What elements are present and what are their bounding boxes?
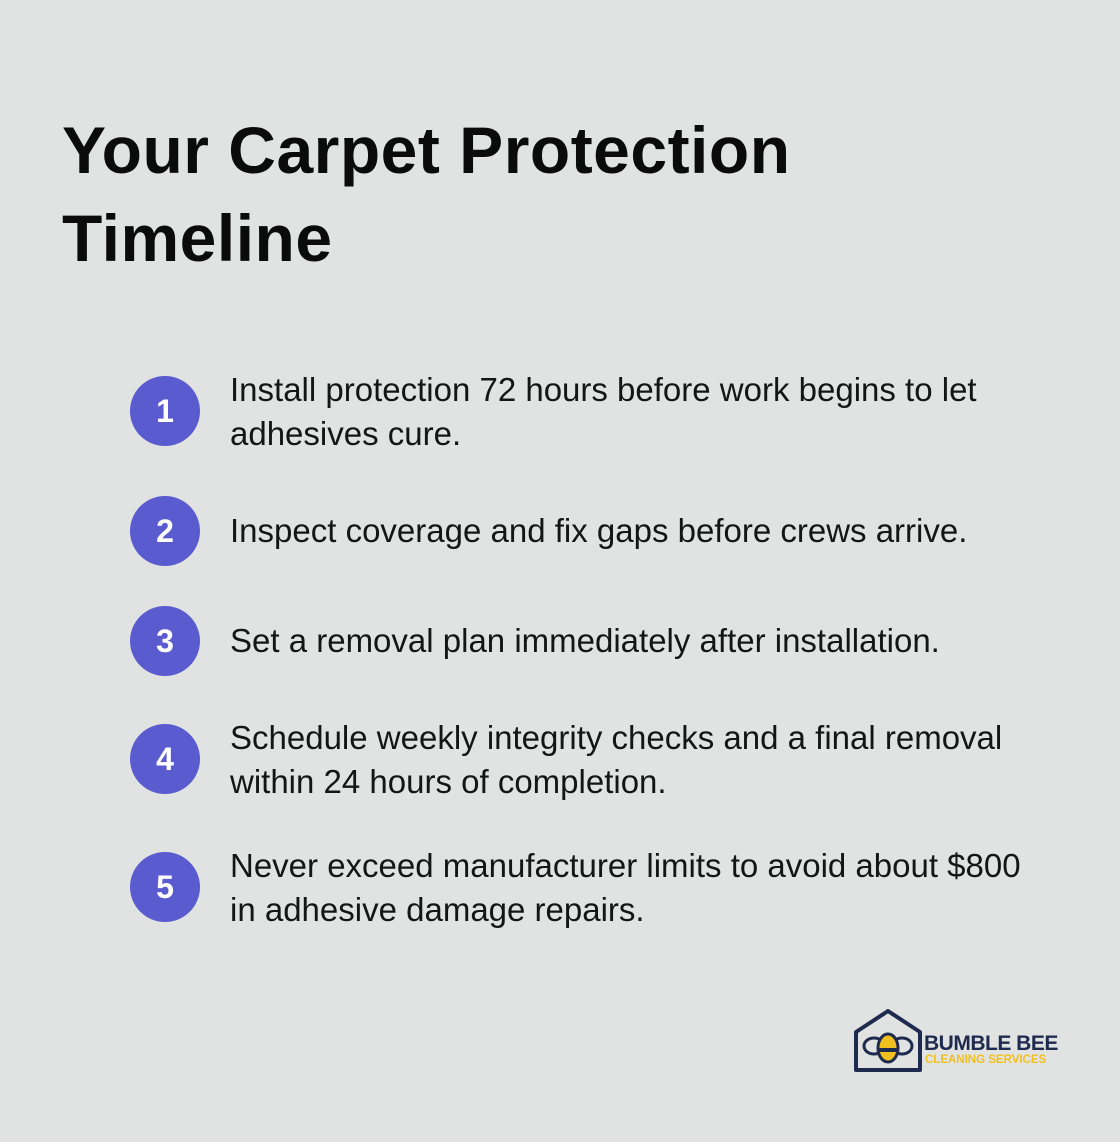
title: Timeline xyxy=(62,201,333,275)
text 4: within 24 hours of completion. xyxy=(230,763,667,800)
circle 1: 1 xyxy=(156,393,174,429)
title: Your Carpet Protection xyxy=(62,113,791,187)
circle 2 xyxy=(130,496,200,566)
circle 4: 4 xyxy=(156,741,174,777)
circle 4 xyxy=(130,724,200,794)
circle 3: 3 xyxy=(156,623,174,659)
text 1: Install protection 72 hours before work begins to let xyxy=(230,371,977,408)
logo: CLEANING SERVICES xyxy=(925,1054,1046,1066)
logo xyxy=(854,1009,1058,1072)
text 1: adhesives cure. xyxy=(230,415,461,452)
circle 1 xyxy=(130,376,200,446)
text 5: Never exceed manufacturer limits to avoid about $800 xyxy=(230,847,1021,884)
brand text: BUMBLE BEE xyxy=(924,1032,1058,1055)
step 2 xyxy=(130,496,967,566)
text 4: Schedule weekly integrity checks and a final removal xyxy=(230,719,1002,756)
circle 2: 2 xyxy=(156,513,174,549)
step 3 xyxy=(130,606,940,676)
text 2: Inspect coverage and fix gaps before crews arrive. xyxy=(230,512,967,549)
step 4 xyxy=(130,719,1002,800)
text 4 xyxy=(230,719,1002,800)
icon: bee house xyxy=(854,1009,922,1072)
circle 5: 5 xyxy=(156,869,174,905)
title xyxy=(62,113,791,275)
circle 5 xyxy=(130,852,200,922)
text 5: in adhesive damage repairs. xyxy=(230,891,645,928)
text 1 xyxy=(230,371,977,452)
step 5 xyxy=(130,847,1021,928)
circle 3 xyxy=(130,606,200,676)
step 1 xyxy=(130,371,977,452)
text 5 xyxy=(230,847,1021,928)
text 3: Set a removal plan immediately after installation. xyxy=(230,622,940,659)
